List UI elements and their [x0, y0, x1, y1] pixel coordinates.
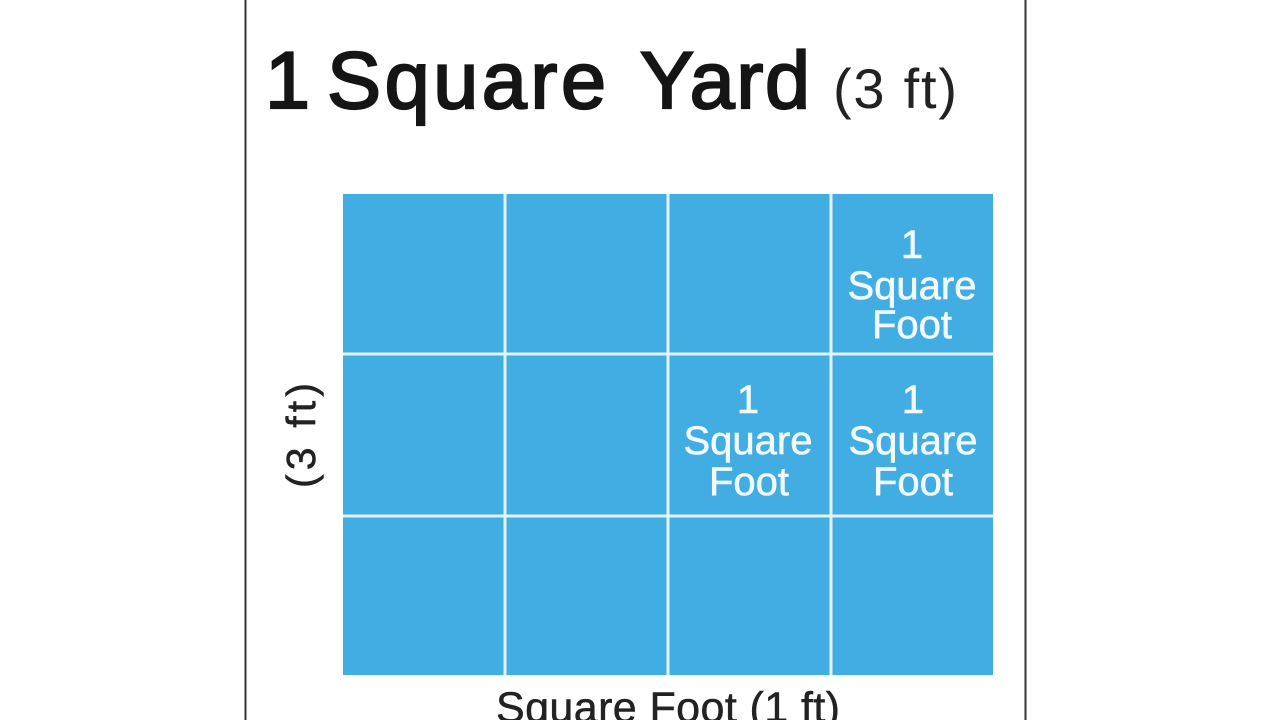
- cell label: top right: 1: [901, 223, 923, 267]
- cell label: middle center: 1: [737, 378, 759, 422]
- grid of 1 square foot cells: [343, 194, 993, 675]
- title: Yard: [640, 36, 810, 126]
- cell label: top right: [848, 223, 976, 347]
- title: [265, 36, 957, 126]
- panel: card border: [246, 0, 1026, 720]
- cell label: middle center: Foot: [709, 460, 789, 504]
- cell label: middle right: Foot: [873, 460, 953, 504]
- cell label: middle center: Square: [684, 419, 812, 463]
- title: 1: [265, 36, 310, 126]
- title: (3 ft): [833, 57, 957, 120]
- cell label: middle right: [849, 378, 977, 504]
- cell label: middle center: [684, 378, 812, 504]
- cell label: top right: Foot: [872, 303, 952, 347]
- side dimension label: (3 ft): [278, 383, 324, 488]
- cell label: middle right: Square: [849, 419, 977, 463]
- cell label: middle right: 1: [902, 378, 924, 422]
- title: Square: [327, 36, 606, 126]
- cell label: top right: Square: [848, 264, 976, 308]
